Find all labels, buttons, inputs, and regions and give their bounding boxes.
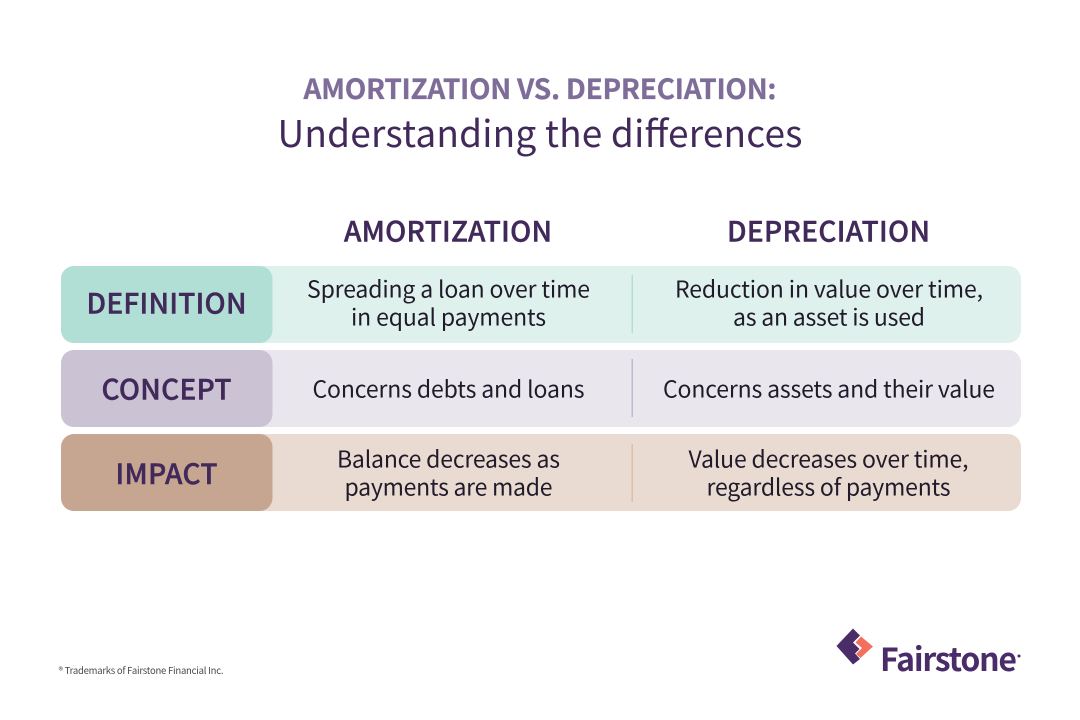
logo icon: coral diamond (856, 636, 873, 658)
label: definition: DEFINITION (86, 282, 246, 322)
amortization definition: Spreading a loan over time (307, 270, 590, 304)
label box: definition (61, 266, 272, 343)
column heading: amortization: AMORTIZATION (344, 210, 552, 250)
logo icon: purple diamond (836, 628, 860, 664)
trademark footnote: ® Trademarks of Fairstone Financial Inc. (58, 663, 224, 677)
depreciation definition: Reduction in value over time, (675, 270, 983, 304)
logo wordmark: Fairstone (880, 635, 1017, 681)
label box: impact (61, 434, 272, 511)
depreciation impact line 2: regardless of payments (706, 468, 950, 502)
amortization concept: Concerns debts and loans (312, 370, 584, 404)
amortization impact line 2: payments are made (344, 468, 552, 502)
row: definition (61, 266, 1021, 343)
logo: Fairstone (836, 628, 1020, 681)
label: impact: IMPACT (116, 453, 218, 493)
row background (61, 350, 1021, 427)
amortization impact: Balance decreases as (337, 440, 560, 474)
column heading: depreciation: DEPRECIATION (727, 210, 930, 250)
title line 1: AMORTIZATION VS. DEPRECIATION: (302, 68, 776, 108)
label: concept: CONCEPT (102, 368, 232, 408)
title line 2: Understanding the differences (278, 104, 802, 158)
row background (61, 266, 1021, 343)
row: impact (61, 434, 1021, 511)
amortization definition line 2: in equal payments (351, 298, 546, 332)
row: concept (61, 350, 1021, 427)
depreciation impact: Value decreases over time, (688, 440, 968, 474)
row background (61, 434, 1021, 511)
registered mark (1018, 654, 1020, 658)
depreciation definition line 2: as an asset is used (733, 298, 925, 332)
title (278, 68, 802, 158)
depreciation concept: Concerns assets and their value (663, 370, 995, 404)
label box: concept (61, 350, 272, 427)
